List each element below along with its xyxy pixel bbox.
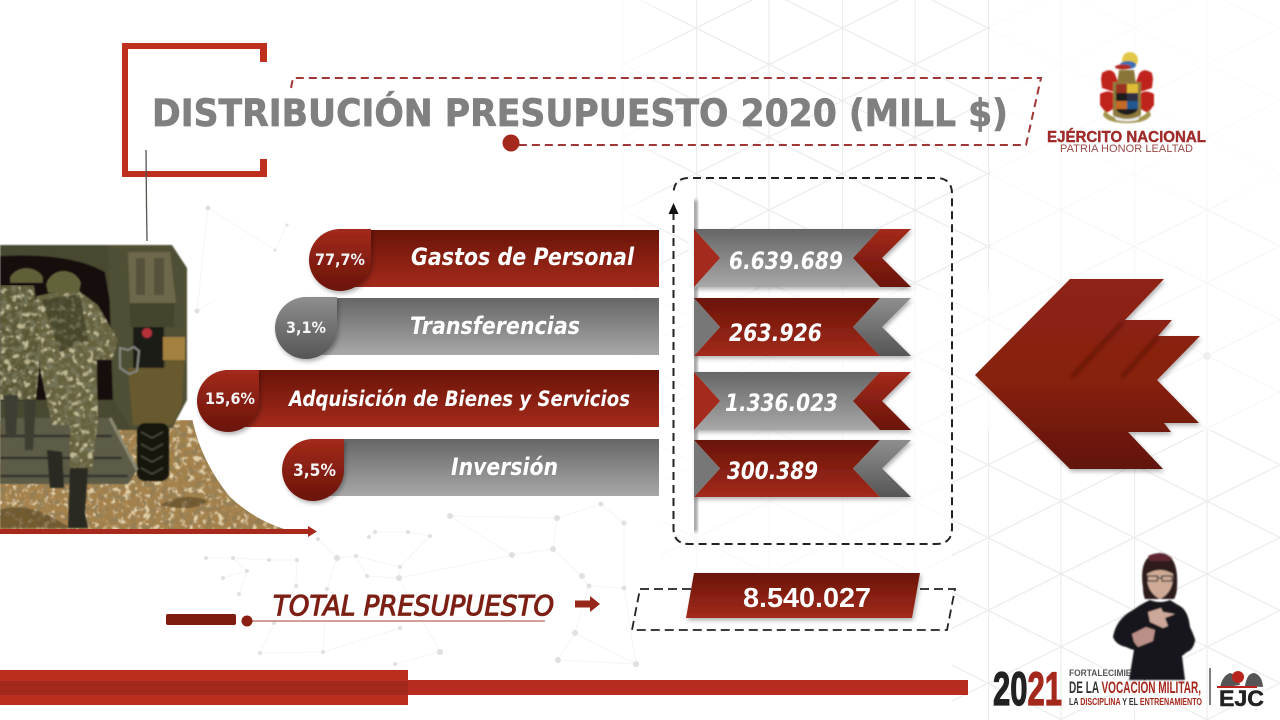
- slogan: FORTALECIMIENTO: [1069, 668, 1149, 679]
- EJC logo: [1217, 671, 1264, 711]
- row: Gastos de Personal: [309, 229, 659, 291]
- photo: rear soldier: [0, 285, 42, 400]
- ribbon: 300.389: 300.389: [727, 457, 818, 485]
- dashed frame with upward arrow: [668, 178, 952, 544]
- decorative bar and underline: [166, 614, 236, 625]
- title frame: dashed outline with dot: [291, 78, 1041, 152]
- logo: Ejército Nacional: [1047, 52, 1206, 155]
- logo motto: PATRIA HONOR LEALTAD: [1060, 143, 1193, 155]
- photo: vehicle rear hardware: [108, 245, 187, 428]
- year 2021: 2021: [993, 662, 1062, 715]
- background: faint network of dots: [194, 206, 1211, 667]
- total value box: 8.540.027: [743, 582, 871, 613]
- photo: vehicle hull: [0, 245, 140, 430]
- row: Adquisición de Bienes y Servicios: 15,6%: [205, 389, 255, 408]
- total text: TOTAL PRESUPUESTO: [273, 589, 554, 622]
- row: Gastos de Personal: 77,7%: [315, 250, 365, 269]
- logo name: EJÉRCITO NACIONAL: [1047, 127, 1206, 146]
- vertical divider: [689, 196, 697, 534]
- row: Adquisición de Bienes y Servicios: Adquisición de Bienes y Servicios: [287, 387, 630, 411]
- row: Inversión: 3,5%: [293, 461, 336, 481]
- photo: vehicle door opening: [0, 255, 113, 400]
- title: DISTRIBUCIÓN PRESUPUESTO 2020 (MILL $): [152, 91, 1008, 135]
- footer campaign text: DE LA VOCACIÓN MILITAR,: [1069, 678, 1201, 697]
- photo: dark ground patch: [0, 497, 208, 528]
- arrow under photo: [0, 526, 317, 537]
- ribbon: 1.336.023: [694, 372, 911, 430]
- total value box: [632, 573, 955, 630]
- row: Transferencias: [275, 297, 659, 359]
- panel: value ribbons: [694, 229, 911, 497]
- background: faint geometric lattice: [610, 0, 1280, 720]
- row: Inversión: [282, 439, 659, 501]
- row: Adquisición de Bienes y Servicios: [197, 370, 659, 432]
- icon: antenna: [146, 150, 147, 241]
- arrow to total: [575, 596, 600, 612]
- panel: budget rows: [197, 229, 659, 501]
- interpreter body: [1113, 600, 1195, 680]
- total label: [166, 589, 600, 626]
- row: Transferencias: 3,1%: [286, 318, 326, 337]
- ribbon: 6.639.689: [694, 229, 911, 287]
- sign language interpreter: [1113, 553, 1195, 680]
- interpreter hair: [1142, 553, 1177, 599]
- ribbon: 6.639.689: 6.639.689: [729, 247, 843, 275]
- title frame: red bracket: [122, 43, 267, 177]
- row: Gastos de Personal: Gastos de Personal: [411, 243, 635, 271]
- ribbon: 263.926: 263.926: [729, 319, 822, 347]
- interpreter face: [1147, 570, 1173, 599]
- footer campaign text: [993, 662, 1210, 715]
- photo: main soldier: [36, 288, 118, 470]
- interpreter hands: [1148, 608, 1175, 628]
- row: Inversión: Inversión: [451, 453, 558, 481]
- footer campaign text: LA DISCIPLINA Y EL ENTRENAMIENTO: [1069, 696, 1202, 708]
- ribbon: 300.389: [694, 440, 911, 497]
- footer red band: [0, 670, 968, 705]
- photo: sandy ground: [0, 420, 290, 532]
- photo: vehicle ramp: [0, 418, 137, 484]
- photo: wheel: [137, 423, 169, 481]
- ribbon: 263.926: [694, 298, 911, 356]
- icon: coat of arms: [1100, 52, 1154, 123]
- interpreter glasses: [1148, 576, 1172, 581]
- photo: soldiers boarding armoured vehicle: [0, 245, 290, 532]
- EJC logo: EJC: [1219, 686, 1264, 711]
- ribbon: 1.336.023: 1.336.023: [725, 389, 838, 417]
- row: Transferencias: Transferencias: [410, 312, 580, 340]
- icon: large red chevron cluster: [975, 279, 1200, 469]
